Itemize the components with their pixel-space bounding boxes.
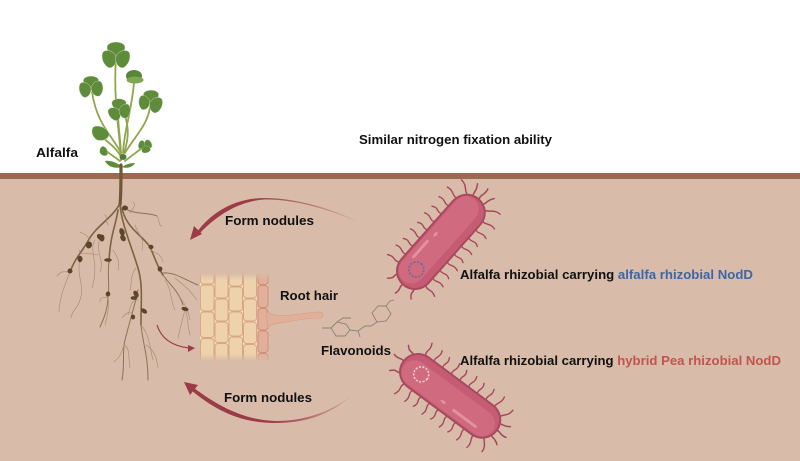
title: similar nitrogen fixation ability: Similar nitrogen fixation ability	[359, 133, 552, 147]
label: bottom form nodules: Form nodules	[224, 391, 312, 405]
plasmid	[411, 364, 432, 385]
arrow: top form nodules	[190, 198, 363, 240]
tap root	[120, 165, 121, 205]
soil	[0, 173, 800, 461]
arrow: bottom form nodules	[184, 382, 351, 423]
highlight	[411, 239, 430, 259]
alfalfa root system	[57, 165, 198, 380]
ground surface line	[0, 173, 800, 179]
alfalfa plant shoot	[78, 42, 165, 168]
background sky	[0, 0, 800, 173]
label: flavonoids: Flavonoids	[321, 344, 391, 358]
flavonoid molecule	[322, 300, 394, 337]
label: root hair: Root hair	[280, 289, 338, 303]
highlight	[452, 408, 477, 429]
root nodules	[68, 206, 189, 319]
plasmid	[406, 259, 427, 280]
bacterium: hybrid pea NodD	[376, 329, 525, 461]
root hair	[266, 311, 323, 327]
bacterium: alfalfa NodD	[372, 168, 511, 314]
label: alfalfa: Alfalfa	[36, 146, 79, 160]
arrow: to root hair cells	[157, 325, 195, 352]
main roots	[70, 205, 163, 325]
label: alfalfa rhizobial carrying hybrid pea NodD: Alfalfa rhizobial carrying hybrid Pea rhizobial NodD	[460, 354, 781, 368]
root cell tissue	[200, 270, 268, 366]
label: top form nodules: Form nodules	[225, 214, 314, 228]
label: alfalfa rhizobial carrying alfalfa NodD: Alfalfa rhizobial carrying alfalfa rhizobial NodD	[460, 268, 753, 282]
